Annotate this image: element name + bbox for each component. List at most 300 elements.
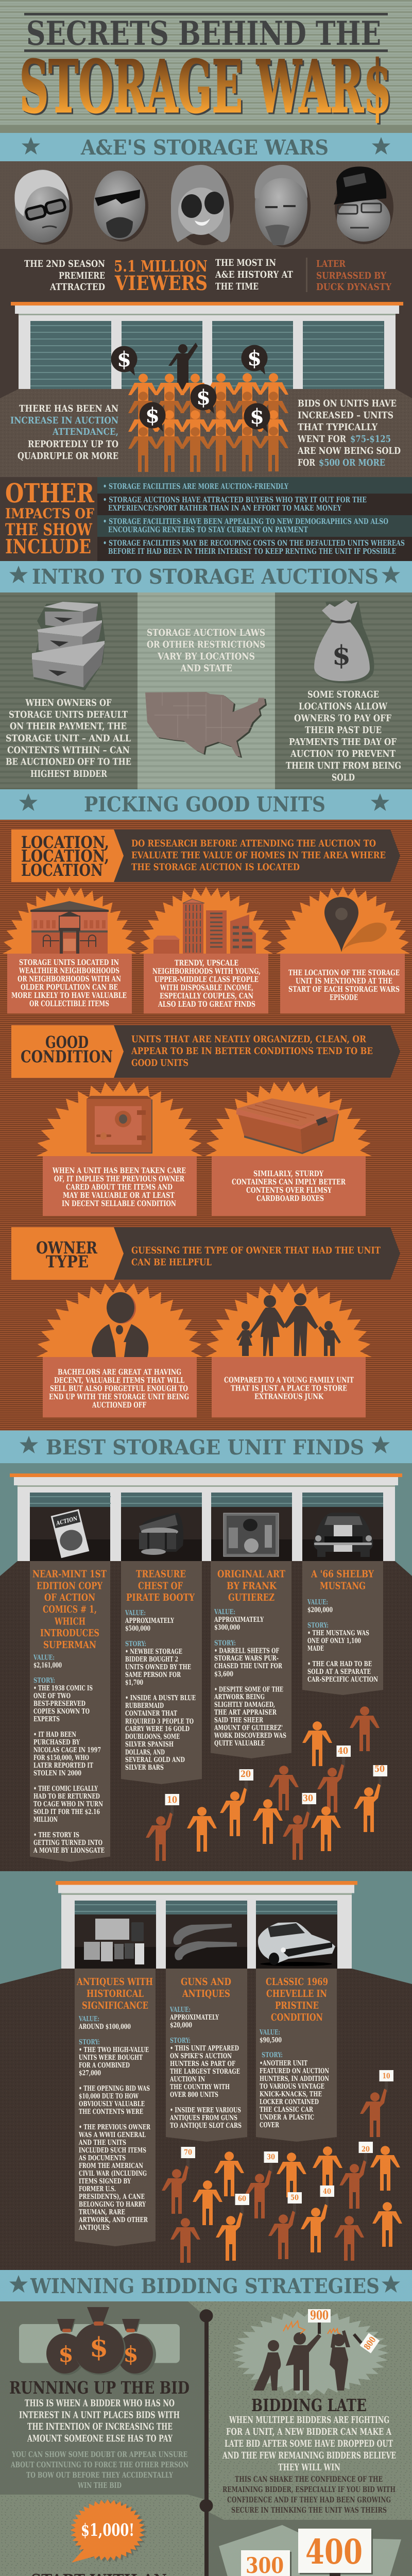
storage building with open doors xyxy=(56,1881,357,1969)
dollar speech bubbles: $ xyxy=(117,347,131,371)
column: shelby mustang: ONE OF ONLY 1,100 xyxy=(307,1637,361,1645)
crowd of bidders xyxy=(128,373,288,472)
column: original art: CHASED THE UNIT FOR xyxy=(214,1662,283,1670)
column: historical antiques: AND THE UNITS xyxy=(78,2139,126,2147)
card: wealthier neighborhoods xyxy=(3,887,136,1013)
column: pirate booty: PIRATE BOOTY xyxy=(126,1592,195,1603)
stat: 5.1 million viewers: 5.1 MILLION xyxy=(114,258,208,276)
portrait: cast member 2 xyxy=(94,171,148,242)
card: sturdy containers: CONTAINERS CAN IMPLY BETTER xyxy=(232,1177,346,1187)
column: original art: ARTWORK BEING xyxy=(214,1693,265,1701)
icon: city towers xyxy=(153,899,256,954)
column: classic chevelle: STORY: xyxy=(262,2051,283,2059)
column: pirate booty: CHEST OF xyxy=(138,1581,183,1592)
column: action comics: NICOLAS CAGE IN 1997 xyxy=(33,1746,101,1754)
column: classic chevelle: KNICK-KNACKS, THE xyxy=(260,2090,322,2098)
strategy: running up the bid: THIS IS WHEN A BIDDER WHO HAS NO xyxy=(25,2398,175,2409)
text: rising bids: WENT FOR xyxy=(297,434,347,445)
column: action comics: GETTING TURNED INTO xyxy=(33,1839,102,1847)
column: historical antiques: SIGNIFICANCE xyxy=(82,2000,148,2011)
stat lead-in text: ATTRACTED xyxy=(49,282,105,293)
bidders with paddles, group two: 10 xyxy=(382,2072,390,2080)
text: rising bids: INCREASED – UNITS xyxy=(298,410,393,421)
heading: other impacts: INCLUDE xyxy=(5,535,91,558)
column: action comics: • THE COMIC LEGALLY xyxy=(33,1785,98,1793)
stat: 5.1 million viewers: VIEWERS xyxy=(114,272,208,295)
text: rising bids: BIDS ON UNITS HAVE xyxy=(298,398,397,409)
card: wealthier neighborhoods: OR COLLECTIBLE ITEMS xyxy=(29,999,109,1008)
panel: intro right column xyxy=(275,592,412,789)
card: bachelors: SELL BUT ALSO FORGETFUL ENOUGH TO xyxy=(50,1384,188,1393)
image: 66 shelby mustang xyxy=(314,1513,373,1557)
column: original art: SAID THE SHEER xyxy=(214,1716,264,1724)
bidders with paddles, group one: 30 xyxy=(303,1793,313,1804)
column: shelby mustang: CAR-SPECIFIC AUCTION xyxy=(307,1675,378,1684)
text: laws vary: VARY BY LOCATIONS xyxy=(157,651,255,662)
card: trendy neighborhoods: TRENDY, UPSCALE xyxy=(175,958,238,968)
text: default auctions: ON THEIR PAYMENT, THE xyxy=(10,721,127,732)
dollar speech bubbles: $ xyxy=(145,403,160,428)
column: pirate booty: REQUIRED 3 PEOPLE TO xyxy=(125,1718,194,1726)
text: default auctions: STORAGE UNITS DEFAULT xyxy=(9,709,128,720)
text: default auctions xyxy=(6,698,131,779)
column: pirate booty: SAME PERSON FOR xyxy=(125,1671,181,1679)
section banner: picking good units xyxy=(0,789,412,820)
section banner: intro to storage auctions: INTRO TO STORAGE AUCTIONS xyxy=(32,565,379,589)
column: original art: QUITE VALUABLE xyxy=(214,1739,265,1748)
image: treasure chest xyxy=(139,1513,183,1555)
column: original art: $3,600 xyxy=(214,1670,233,1679)
dollar speech bubbles: $ xyxy=(196,385,211,410)
bidders with paddles, group one: 10 xyxy=(167,1795,177,1805)
stat note: duck dynasty xyxy=(316,259,392,293)
text: auction attendance: THERE HAS BEEN AN xyxy=(19,403,118,414)
banner: good condition: APPEAR TO BE IN BETTER CONDITIONS TEND TO BE xyxy=(131,1046,373,1057)
strategy: running up the bid: RUNNING UP THE BID xyxy=(9,2378,190,2398)
banner: good condition xyxy=(11,1025,400,1078)
column: pirate booty xyxy=(121,1561,202,1784)
column: guns and antiques: VALUE: xyxy=(169,2006,191,2014)
panel: intro centre column xyxy=(138,592,275,789)
heading: other impacts: IMPACTS OF xyxy=(5,506,94,522)
card: wealthier neighborhoods: MORE LIKELY TO HAVE VALUABLE xyxy=(11,991,127,1000)
bidders with paddles, group two: 60 xyxy=(238,2195,246,2203)
bidders with paddles, group two: 30 xyxy=(267,2153,275,2161)
stat lead-in text xyxy=(24,259,105,293)
column: action comics: STOLEN IN 2000 xyxy=(33,1769,81,1777)
column: shelby mustang: STORY: xyxy=(307,1621,329,1630)
text: paying off dues: OWNERS TO PAY OFF xyxy=(294,713,391,724)
header panel xyxy=(0,0,412,133)
icon: storage tote xyxy=(236,1098,339,1154)
image: antique documents xyxy=(84,1919,144,1964)
bidders with paddles, group one xyxy=(146,1706,387,1861)
section banner: best storage unit finds xyxy=(0,1430,412,1463)
column: pirate booty: RUBBERMAID xyxy=(125,1702,164,1710)
column: action comics: COMICS # 1, xyxy=(43,1604,97,1615)
card: young families xyxy=(205,1282,372,1417)
banner: good condition: GOOD xyxy=(45,1032,89,1052)
column: classic chevelle: PRISTINE xyxy=(275,2000,319,2011)
card: sturdy containers: CONTENTS OVER FLIMSY xyxy=(246,1185,332,1195)
card: well kept items: OF, IT IMPLIES THE PREVIOUS OWNER xyxy=(54,1174,184,1183)
section banner: winning bidding strategies: WINNING BIDDING STRATEGIES xyxy=(30,2274,380,2298)
column: original art: GUTIEREZ xyxy=(228,1592,274,1603)
column: historical antiques: AS DOCUMENTS xyxy=(78,2154,126,2162)
column: historical antiques: CIVIL WAR (INCLUDING xyxy=(79,2170,147,2178)
column: action comics: • THE 1938 COMIC IS xyxy=(33,1684,93,1692)
column: action comics: NEAR-MINT 1ST xyxy=(32,1568,107,1580)
column: pirate booty: SILVER SPANISH xyxy=(125,1740,174,1749)
column: shelby mustang: $200,000 xyxy=(307,1606,333,1614)
icon: crowd with paddles: 900 xyxy=(310,2308,329,2323)
card: sturdy containers: SIMILARLY, STURDY xyxy=(253,1169,323,1178)
column: guns and antiques: ANTIQUES xyxy=(182,1988,230,1999)
card: bachelors: END UP WITH THE STORAGE UNIT BEING xyxy=(49,1392,189,1401)
column: action comics: VALUE: xyxy=(33,1654,55,1662)
column: historical antiques: ARTWORK, AND OTHER xyxy=(78,2216,148,2224)
text: default auctions: HIGHEST BIDDER xyxy=(30,769,108,779)
heading: other impacts: OTHER xyxy=(5,478,94,509)
strategy: running up the bid: TO BOW OUT BEFORE THEY ACCIDENTALLY xyxy=(26,2470,173,2480)
callout: $1,000 burst: $1,000! xyxy=(81,2520,134,2540)
column: guns and antiques: HUNTERS AS PART OF xyxy=(170,2060,235,2068)
strategy: running up the bid: THE INTENTION OF INCREASING THE xyxy=(27,2421,173,2432)
strategy: running up the bid: ABOUT CONTINUING TO FORCE THE OTHER PERSON xyxy=(10,2460,188,2469)
column: guns and antiques: STORY: xyxy=(170,2037,191,2045)
column: pirate booty: SILVER BARS xyxy=(125,1764,164,1772)
banner: owner type: TYPE xyxy=(46,1252,89,1272)
panel: intro left column xyxy=(0,592,138,789)
column: guns and antiques: • THIS UNIT APPEARED xyxy=(170,2044,239,2053)
text: laws vary: OR OTHER RESTRICTIONS xyxy=(147,639,265,650)
column: guns and antiques: APPROXIMATELY xyxy=(169,2013,219,2022)
strategy: running up the bid xyxy=(0,2301,204,2499)
card: young families: EXTRANEOUS JUNK xyxy=(254,1392,324,1401)
text: laws vary: AND STATE xyxy=(180,663,232,674)
column: historical antiques: FROM THE AMERICAN xyxy=(79,2162,143,2170)
column: historical antiques: UNITS WERE BOUGHT xyxy=(79,2054,143,2062)
text: paying off dues: SOME STORAGE xyxy=(307,689,379,700)
panel: storage facility with auction crowd xyxy=(0,302,412,477)
text: auction attendance xyxy=(10,403,118,462)
column: classic chevelle: UNDER A PLASTIC xyxy=(260,2113,314,2122)
text: auction attendance: QUADRUPLE OR MORE xyxy=(18,451,118,462)
text: paying off dues: SOLD xyxy=(332,772,355,783)
column: pirate booty: CARRY WERE 16 GOLD xyxy=(125,1725,190,1733)
banner: location xyxy=(11,829,400,882)
banner: location: LOCATION, xyxy=(21,846,109,866)
column: guns and antiques: ON SPIKE'S AUCTION xyxy=(170,2052,232,2060)
text: rising bids: THAT TYPICALLY xyxy=(298,422,378,433)
icon: family silhouette xyxy=(236,1293,341,1356)
column: historical antiques: • THE PREVIOUS OWNER xyxy=(79,2123,151,2131)
column: guns and antiques: THE LARGEST STORAGE xyxy=(170,2067,240,2076)
icon: map pin xyxy=(324,897,387,952)
column: action comics: OF ACTION xyxy=(44,1592,95,1603)
column: shelby mustang: • THE MUSTANG WAS xyxy=(307,1629,369,1637)
column: action comics: SOLD IT FOR THE $2.16 xyxy=(33,1808,100,1816)
bidders with paddles, group one: 40 xyxy=(338,1746,348,1756)
column: historical antiques: WAS A WWII GENERAL xyxy=(78,2131,146,2139)
card: bachelors xyxy=(36,1282,203,1417)
column: historical antiques: HISTORICAL xyxy=(87,1988,144,1999)
bidders with paddles, group one: 20 xyxy=(241,1769,251,1780)
column: pirate booty: $1,700 xyxy=(125,1679,143,1687)
column: original art: AMOUNT OF GUTIEREZ' xyxy=(214,1724,283,1732)
text: rising bids xyxy=(297,398,401,468)
column: action comics: MILLION xyxy=(33,1816,58,1824)
column: guns and antiques: ANTIQUES FROM GUNS xyxy=(169,2114,237,2122)
column: action comics: EXPERTS xyxy=(33,1715,60,1723)
card: young families: COMPARED TO A YOUNG FAMILY UNIT xyxy=(224,1376,354,1385)
icon: money bags: $ xyxy=(90,2332,108,2363)
text: paying off dues: AUCTION TO PREVENT xyxy=(290,749,396,759)
column: shelby mustang: • THE CAR HAD TO BE xyxy=(307,1660,372,1668)
card: young families: THAT IS JUST A PLACE TO STORE xyxy=(231,1384,347,1393)
text: rising bids: $75-$125 xyxy=(350,434,391,445)
text: default auctions: CONTENTS WITHIN – CAN xyxy=(7,745,130,756)
icon: money bags: $ xyxy=(123,2342,139,2367)
portrait: cast member 3 xyxy=(171,165,234,245)
card: wealthier neighborhoods: OR NEIGHBORHOODS WITH AN xyxy=(18,974,121,984)
column: historical antiques: FORMER U.S. xyxy=(79,2185,116,2193)
column: classic chevelle: LOCKER CONTAINED xyxy=(260,2098,319,2106)
image: action comics: ACTION xyxy=(55,1515,79,1527)
image: antique pistols xyxy=(173,1924,237,1960)
bidders with paddles, group two xyxy=(162,2070,402,2263)
map: united states xyxy=(145,692,267,758)
stat lead-in text: THE 2ND SEASON xyxy=(24,259,105,269)
card: well kept items xyxy=(36,1081,203,1216)
column: pirate booty: SEVERAL GOLD AND xyxy=(125,1756,185,1764)
column: original art: • DARRELL SHEETS OF xyxy=(214,1647,279,1655)
stat follow-up text: A&E HISTORY AT xyxy=(215,269,294,280)
column: action comics: BEST-PRESERVED xyxy=(33,1700,85,1708)
card: bachelors: BACHELORS ARE GREAT AT HAVING xyxy=(58,1367,181,1377)
portrait: cast member 1 xyxy=(14,170,73,245)
portrait: cast member 5 xyxy=(334,166,393,244)
column: original art: • DESPITE SOME OF THE xyxy=(214,1686,283,1694)
column: pirate booty: APPROXIMATELY xyxy=(125,1617,174,1625)
impact list xyxy=(103,482,405,556)
card: wealthier neighborhoods: WEALTHIER NEIGHBORHOODS xyxy=(19,966,119,975)
column: original art: APPROXIMATELY xyxy=(214,1616,264,1624)
column: historical antiques: THE CONTENTS WERE xyxy=(79,2108,143,2116)
card: sturdy containers: CARDBOARD BOXES xyxy=(256,1194,324,1203)
column: classic chevelle xyxy=(256,1969,337,2142)
card: trendy neighborhoods xyxy=(139,887,273,1013)
column: original art: SLIGHTLY DAMAGED, xyxy=(214,1701,275,1709)
column: classic chevelle: $90,500 xyxy=(260,2036,282,2044)
callout: $1,000 burst xyxy=(70,2499,147,2563)
column: original art xyxy=(211,1561,291,1758)
section banner: picking good units: PICKING GOOD UNITS xyxy=(84,792,325,817)
column: action comics: ONE OF TWO xyxy=(33,1692,71,1700)
timeline divider with nodes xyxy=(200,2309,213,2576)
column: classic chevelle: CONDITION xyxy=(271,2012,323,2023)
stat: 5.1 million viewers xyxy=(114,258,208,295)
card: wealthier neighborhoods: OLDER POPULATION CAN BE xyxy=(21,982,118,992)
banner: owner type: CAN BE HELPFUL xyxy=(131,1257,212,1268)
section banner: best storage unit finds: BEST STORAGE UNIT FINDS xyxy=(46,1435,364,1460)
column: historical antiques: $27,000 xyxy=(79,2069,101,2077)
icon: crowd with paddles xyxy=(232,2308,389,2395)
column: action comics: PURCHASED BY xyxy=(33,1738,80,1747)
stat note: duck dynasty: SURPASSED BY xyxy=(316,270,387,281)
column: pirate booty: UNITS OWNED BY THE xyxy=(125,1663,191,1671)
banner: good condition: CONDITION xyxy=(21,1047,113,1066)
column: pirate booty: $500,000 xyxy=(125,1624,150,1633)
column: shelby mustang: MADE xyxy=(307,1645,324,1653)
column: classic chevelle: THE CLASSIC CAR xyxy=(260,2106,314,2114)
icon: bid paddles xyxy=(219,2525,401,2576)
image: action comics xyxy=(51,1509,89,1558)
column: pirate booty: VALUE: xyxy=(125,1609,146,1617)
column: historical antiques: PRESIDENTS), A CANE xyxy=(79,2193,145,2201)
text: rising bids: FOR xyxy=(298,457,316,468)
banner: location: THE STORAGE AUCTION IS LOCATED xyxy=(131,862,300,873)
dollar speech bubbles xyxy=(111,345,270,433)
bidders with paddles, group two: 70 xyxy=(184,2148,192,2157)
column: shelby mustang: MUSTANG xyxy=(320,1581,366,1592)
icon: mansion xyxy=(30,901,109,954)
column: classic chevelle: FEATURED ON AUCTION xyxy=(260,2067,329,2075)
column: original art: $300,000 xyxy=(214,1623,240,1632)
strategy: bidding late xyxy=(222,2308,396,2515)
stat follow-up text: THE MOST IN xyxy=(215,258,276,268)
column: classic chevelle: VALUE: xyxy=(259,2028,280,2037)
card: well kept items: MAY BE VALUABLE OR AT LEAST xyxy=(63,1191,175,1200)
storage building xyxy=(11,302,403,389)
bidders with paddles, group two: 20 xyxy=(362,2145,370,2154)
icon: stacked boxes xyxy=(32,602,105,690)
column: pirate booty: CONTAINER THAT xyxy=(125,1709,177,1718)
section banner: A&E's Storage Wars xyxy=(0,133,412,161)
column: guns and antiques: THE COUNTRY WITH xyxy=(170,2083,230,2091)
column: guns and antiques: AUCTION IN xyxy=(169,2075,205,2083)
icon: money bag: $ xyxy=(332,640,351,671)
strategy: running up the bid: INTEREST IN A UNIT PLACES BIDS WITH xyxy=(19,2410,180,2420)
text: paying off dues: LOCATIONS ALLOW xyxy=(299,701,388,712)
icon: bachelor silhouette xyxy=(92,1292,148,1357)
column: action comics xyxy=(30,1561,110,1862)
column: action comics: • THE STORY IS xyxy=(33,1831,79,1839)
column: action comics: STORY: xyxy=(33,1676,55,1685)
column: original art: BY FRANK xyxy=(227,1581,277,1592)
column: classic chevelle: TO VARIOUS VINTAGE xyxy=(260,2082,324,2091)
column: pirate booty: • NEWBIE STORAGE xyxy=(125,1648,182,1656)
text: default auctions: WHEN OWNERS OF xyxy=(25,698,112,708)
column: historical antiques: ITEMS SIGNED BY xyxy=(79,2177,131,2185)
card: bachelors: AUCTIONED OFF xyxy=(92,1400,146,1410)
icon: money bags: $ xyxy=(58,2342,74,2367)
column: classic chevelle: •ANOTHER UNIT xyxy=(260,2059,307,2067)
column: guns and antiques xyxy=(166,1969,247,2142)
icon: safe xyxy=(87,1096,152,1154)
column: original art: STORY: xyxy=(214,1639,236,1648)
column: historical antiques: STORY: xyxy=(79,2038,100,2046)
card: trendy neighborhoods: ESPECIALLY COUPLES, CAN xyxy=(160,991,253,1001)
column: shelby mustang xyxy=(302,1561,383,1695)
card: trendy neighborhoods: UPPER-MIDDLE CLASS PEOPLE xyxy=(154,975,259,984)
strategy: running up the bid: AMOUNT SOMEONE ELSE HAS TO PAY xyxy=(27,2433,173,2444)
card: wealthier neighborhoods: STORAGE UNITS LOCATED IN xyxy=(19,958,119,967)
column: action comics: INTRODUCES xyxy=(40,1628,99,1639)
impact list: • STORAGE FACILITIES ARE MORE AUCTION-FRIENDLY xyxy=(103,482,288,491)
panel: winning strategies xyxy=(0,2301,412,2576)
bidders with paddles, group two: 40 xyxy=(323,2188,331,2196)
column: pirate booty: • INSIDE A DUSTY BLUE xyxy=(125,1694,196,1702)
stat follow-up text: THE TIME xyxy=(215,281,259,292)
panel: viewership stats xyxy=(0,249,412,401)
card: sturdy containers xyxy=(205,1081,372,1216)
card: location mention xyxy=(276,887,410,1013)
column: action comics: TO CAGE WHO IN TURN xyxy=(33,1800,103,1808)
text: laws vary: STORAGE AUCTION LAWS xyxy=(147,628,265,638)
column: pirate booty: TREASURE xyxy=(136,1568,186,1580)
column: historical antiques: • THE TWO HIGH-VALUE xyxy=(79,2046,149,2054)
column: pirate booty: DOUBLOONS, SOME xyxy=(125,1733,180,1741)
card: trendy neighborhoods: ALSO LEAD TO GREAT FINDS xyxy=(158,999,255,1009)
column: classic chevelle: CLASSIC 1969 xyxy=(266,1976,328,1988)
card: location mention: EPISODE xyxy=(330,993,358,1002)
strategy: raising big by large margin xyxy=(209,2512,412,2576)
strategy: start with an opening bid xyxy=(11,2499,187,2576)
card: trendy neighborhoods: WITH DISPOSABLE INCOME, xyxy=(160,983,253,992)
column: action comics: FOR $150,000, WHO xyxy=(33,1754,89,1762)
card: bachelors: DECENT, VALUABLE ITEMS THAT WILL xyxy=(54,1376,184,1385)
column: classic chevelle: COVER xyxy=(260,2121,280,2129)
text: auction attendance: INCREASE IN AUCTION xyxy=(10,415,118,426)
icon: money bags xyxy=(46,2307,156,2375)
strategy: running up the bid: YOU CAN SHOW SOME DOUBT OR APPEAR UNSURE xyxy=(11,2450,187,2459)
icon: crowd with paddles: 800 xyxy=(362,2335,379,2352)
text: laws vary xyxy=(147,628,265,674)
column: historical antiques: • THE OPENING BID WAS xyxy=(79,2084,150,2093)
column: pirate booty: STORY: xyxy=(125,1640,146,1648)
column: action comics: $2,161,000 xyxy=(33,1661,62,1669)
banner: location: LOCATION xyxy=(21,860,103,880)
column: pirate booty: DOLLARS, AND xyxy=(125,1749,165,1757)
column: shelby mustang: VALUE: xyxy=(307,1598,328,1606)
dollar speech bubbles: $ xyxy=(247,346,262,370)
column: historical antiques xyxy=(75,1969,156,2246)
text: default auctions: STORAGE UNIT – AND ALL xyxy=(6,733,131,744)
text: auction attendance: ATTENDANCE, xyxy=(52,427,118,437)
banner: owner type xyxy=(11,1227,400,1280)
stat note: duck dynasty: DUCK DYNASTY xyxy=(316,282,392,293)
text: paying off dues: THEIR PAST DUE xyxy=(305,725,382,736)
column: action comics: LATER REPORTED IT xyxy=(33,1761,93,1770)
column: shelby mustang: SOLD AT A SEPARATE xyxy=(307,1668,371,1676)
portrait: cast member 4 xyxy=(254,165,311,247)
impact list: ENCOURAGING RENTERS TO STAY CURRENT ON PAYMENT xyxy=(108,525,308,534)
column: action comics: EDITION COPY xyxy=(37,1581,102,1592)
bidders with paddles, group two: 50 xyxy=(290,2194,299,2202)
column: guns and antiques: GUNS AND xyxy=(181,1976,231,1988)
banner: owner type: OWNER xyxy=(36,1238,97,1258)
heading: other impacts xyxy=(5,478,94,558)
bidders with paddles, group one: 50 xyxy=(374,1764,385,1774)
column: shelby mustang: A '66 SHELBY xyxy=(311,1568,374,1580)
column: action comics: SUPERMAN xyxy=(43,1639,96,1651)
column: original art: WORK DISCOVERED WAS xyxy=(214,1732,286,1740)
column: action comics: WHICH xyxy=(54,1616,85,1627)
column: classic chevelle: CHEVELLE IN xyxy=(266,1988,327,1999)
heading: other impacts: THE SHOW xyxy=(5,520,93,539)
icon: bid paddles: 400 xyxy=(305,2532,363,2572)
